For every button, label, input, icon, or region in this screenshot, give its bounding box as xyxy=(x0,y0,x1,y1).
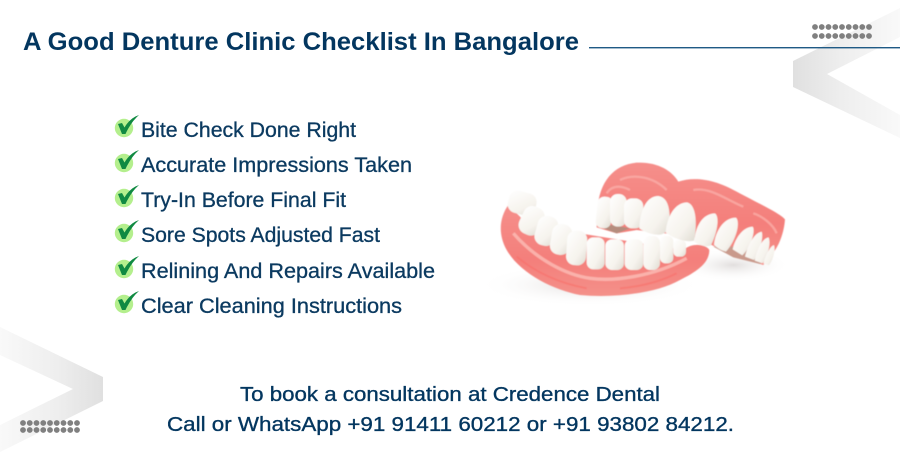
item: sore spots: Sore Spots Adjusted Fast xyxy=(141,224,380,247)
item: bite check: Bite Check Done Right xyxy=(141,119,356,142)
title: A Good Denture Clinic Checklist In Bangalore xyxy=(23,28,579,56)
upper teeth xyxy=(595,194,775,265)
cta line 2: Call or WhatsApp +91 91411 60212 or +91 93802 84212. xyxy=(167,414,734,436)
cta line 1: To book a consultation at Credence Dental xyxy=(240,384,660,406)
illustration: dentures xyxy=(477,163,790,307)
call to action xyxy=(167,384,734,436)
decorative chevron: top right xyxy=(793,8,900,138)
lower denture gum xyxy=(501,205,709,296)
lower teeth xyxy=(506,189,686,270)
item: relining: Relining And Repairs Available xyxy=(141,260,435,283)
upper denture gum xyxy=(597,163,785,265)
checklist xyxy=(115,115,435,318)
item: cleaning: Clear Cleaning Instructions xyxy=(141,295,402,318)
item: impressions: Accurate Impressions Taken xyxy=(141,154,412,177)
item: try-in: Try-In Before Final Fit xyxy=(141,189,346,212)
decorative chevron: bottom left xyxy=(0,327,103,452)
dot grid: bottom left xyxy=(20,420,80,433)
title rule xyxy=(589,47,900,48)
dot grid: top right xyxy=(812,24,872,39)
